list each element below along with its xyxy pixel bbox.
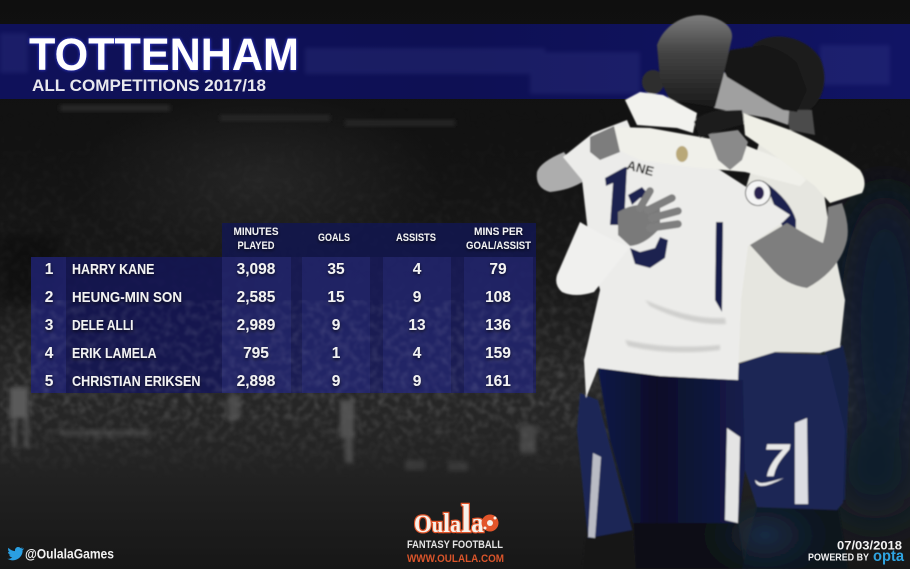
right player shorts [736,352,845,510]
row 5: Christian Eriksen: 161 [485,373,511,390]
background: blurred stadium [0,104,910,546]
logo football [482,514,498,532]
row 4: Erik Lamela: 1 [332,345,341,362]
title banner band [0,24,910,99]
main arm across backs [614,127,806,186]
premier league sleeve badge [746,180,770,206]
player: back-left legs [582,520,636,569]
table headers [234,226,531,252]
mud stain [676,146,688,162]
table noise texture [31,300,536,393]
centre player shorts [598,368,745,523]
right player shirt [728,140,845,364]
table headers: PLAYED [238,240,275,252]
right shorts stripe [795,418,808,504]
row 1: Harry Kane: HARRY KANE [72,261,154,278]
row 4: Erik Lamela: ERIK LAMELA [72,345,157,362]
back player shorts [577,393,632,538]
row 2: Heung-Min Son: 2,585 [237,289,276,306]
row 5: Christian Eriksen [45,373,511,390]
row 3: Dele Alli [45,317,511,334]
row 5: Christian Eriksen: 9 [332,373,341,390]
row 3: Dele Alli: 2,989 [237,317,276,334]
row 5: Christian Eriksen: CHRISTIAN ERIKSEN [72,373,200,390]
third player hair [753,36,824,112]
bare right arm [750,203,848,288]
row 1: Harry Kane: 79 [489,261,507,278]
row 4: Erik Lamela [45,345,511,362]
far left bare arm [537,152,584,192]
row 1: Harry Kane: 35 [327,261,345,278]
date: 07/03/2018 [837,540,903,552]
row 4: Erik Lamela: 159 [485,345,511,362]
right neck [785,110,815,135]
row 2: Heung-Min Son: 15 [327,289,345,306]
son hair [722,45,807,112]
shirt fold shadows [625,300,726,352]
twitter handle: @OulalaGames [25,546,114,562]
centre shorts stripe [725,428,740,523]
table headers: MINUTES [234,226,278,238]
far left head [642,70,664,94]
row 4: Erik Lamela: 795 [243,345,269,362]
row 4: Erik Lamela: 4 [45,345,54,362]
player: right legs [742,505,848,569]
back player shorts stripe [588,453,601,538]
table [31,223,536,393]
row 2: Heung-Min Son: 108 [485,289,511,306]
row 2: Heung-Min Son: HEUNG-MIN SON [72,289,182,306]
row 5: Christian Eriksen: 5 [45,373,54,390]
logo wordmark: Oulala [414,496,484,541]
photo: players embracing [537,15,865,569]
table headers: MINS PER [474,226,523,238]
row 2: Heung-Min Son [45,289,511,306]
name column tint [66,257,222,393]
row 1: Harry Kane: 3,098 [237,261,276,278]
title: TOTTENHAM [29,29,299,80]
row 1: Harry Kane: 4 [413,261,422,278]
opta logo: opta [873,548,904,565]
kane hand on back [618,191,678,246]
row 4: Erik Lamela: 4 [413,345,422,362]
row 3: Dele Alli: 136 [485,317,511,334]
upper sleeve [625,92,697,133]
row 2: Heung-Min Son: 2 [45,289,53,306]
shirt number [605,167,668,268]
subtitle: ALL COMPETITIONS 2017/18 [32,76,266,95]
left lower sleeve [556,222,630,295]
row 5: Christian Eriksen: 9 [413,373,422,390]
player: centre legs [633,520,745,569]
row 1: Harry Kane [45,261,507,278]
son face [714,72,790,125]
kane head [657,15,732,107]
header background [222,223,536,257]
row 3: Dele Alli: 13 [408,317,426,334]
logo tagline: FANTASY FOOTBALL [407,539,503,551]
row 3: Dele Alli: 9 [332,317,341,334]
powered by: POWERED BY [808,552,869,564]
shirt name: ANE [625,157,656,179]
row 5: Christian Eriksen: 2,898 [237,373,276,390]
navy shoulder trim [765,182,796,262]
black glove [694,110,744,138]
hand over arm [708,130,748,170]
right player far shorts [825,345,849,500]
shorts number seven: 7 [763,434,791,486]
left hand [590,126,620,160]
row 3: Dele Alli: DELE ALLI [72,317,134,334]
icon: twitter bird [7,547,24,560]
right forearm [743,113,865,203]
logo: Oulala fantasy football [407,496,504,565]
logo url: WWW.OULALA.COM [407,553,504,565]
centre player shirt [563,120,790,398]
table headers: GOAL/ASSIST [466,240,531,252]
row background [31,257,536,393]
blue glow by the legs [703,493,827,569]
shirt stripe [715,222,723,312]
table headers: ASSISTS [396,232,436,244]
rank column tint [31,257,66,393]
nike swoosh [755,478,784,486]
row 2: Heung-Min Son: 9 [413,289,422,306]
row 1: Harry Kane: 1 [45,261,54,278]
row 3: Dele Alli: 3 [45,317,54,334]
table headers: GOALS [318,232,350,244]
data column tints [222,257,533,393]
